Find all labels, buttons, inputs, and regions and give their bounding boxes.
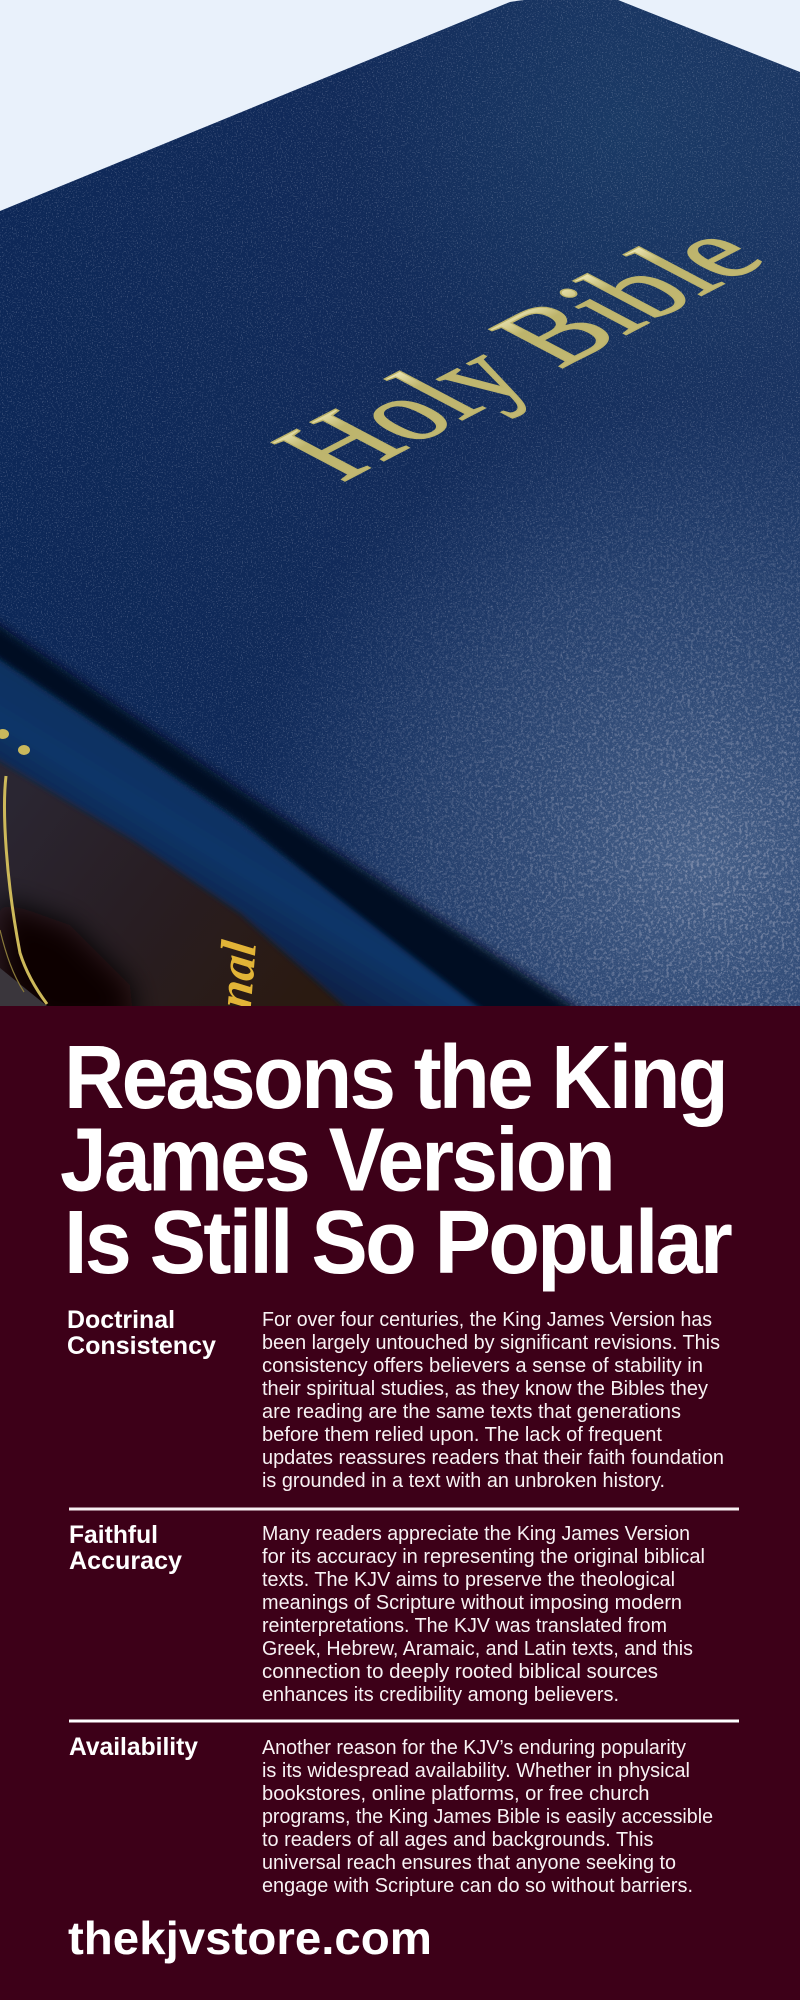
title: Reasons the King [64, 1028, 726, 1128]
text block: Faithful Accuracy: reinterpretations. The KJV was translated from [262, 1615, 667, 1637]
text block: Doctrinal Consistency: updates reassures readers that their faith foundation [262, 1447, 724, 1469]
title: James Version [60, 1110, 613, 1210]
book cover [0, 0, 800, 1006]
title [60, 1028, 732, 1293]
text block: Faithful Accuracy: Many readers appreciate the King James Version [262, 1523, 690, 1545]
text block: Doctrinal Consistency: been largely untouched by significant revisions. This [262, 1332, 720, 1354]
text block: Availability: engage with Scripture can do so without barriers. [262, 1875, 693, 1897]
text block: Availability: bookstores, online platforms, or free church [262, 1783, 650, 1805]
heading: Faithful Accuracy [69, 1521, 182, 1575]
text block: Faithful Accuracy: for its accuracy in representing the original biblical [262, 1546, 705, 1568]
text block: Availability: programs, the King James Bible is easily accessible [262, 1806, 713, 1828]
panel: Doctrinal Consistency [67, 1306, 724, 1492]
text block: Faithful Accuracy [262, 1523, 705, 1706]
blue spine band [0, 654, 495, 1020]
spine gold rule lines [0, 776, 47, 1004]
lower book spine, dark brown [0, 758, 350, 1006]
panel: Availability [69, 1733, 713, 1897]
spine gold lettering: nal [206, 938, 267, 1011]
heading: Doctrinal Consistency [67, 1306, 216, 1360]
footer website: thekjvstore.com [68, 1912, 432, 1964]
heading: Faithful Accuracy: Faithful [69, 1521, 158, 1549]
title: Is Still So Popular [64, 1193, 732, 1293]
text block: Availability [262, 1737, 713, 1897]
panel: Faithful Accuracy [69, 1521, 705, 1706]
heading: Doctrinal Consistency: Consistency [67, 1332, 216, 1360]
text block: Doctrinal Consistency: For over four centuries, the King James Version has [262, 1309, 712, 1331]
text block: Doctrinal Consistency: is grounded in a text with an unbroken history. [262, 1470, 665, 1492]
text block: Doctrinal Consistency [262, 1309, 724, 1492]
heading: Availability: Availability [69, 1733, 198, 1761]
text block: Faithful Accuracy: meanings of Scripture without imposing modern [262, 1592, 682, 1614]
photo backdrop [0, 0, 800, 211]
text block: Availability: universal reach ensures that anyone seeking to [262, 1852, 676, 1874]
heading: Doctrinal Consistency: Doctrinal [67, 1306, 175, 1334]
dark groove along hinge [0, 618, 586, 1006]
gold foil title on cover: Holy Bible [242, 208, 794, 495]
text block: Availability: Another reason for the KJV’s enduring popularity [262, 1737, 686, 1759]
text block: Doctrinal Consistency: consistency offers believers a sense of stability in [262, 1355, 703, 1377]
text block: Faithful Accuracy: connection to deeply rooted biblical sources [262, 1661, 658, 1683]
text block: Availability: is its widespread availability. Whether in physical [262, 1760, 690, 1782]
text block: Doctrinal Consistency: their spiritual studies, as they know the Bibles they [262, 1378, 708, 1400]
photo: closed blue Holy Bible [0, 0, 800, 1030]
spine gold dots [0, 729, 30, 755]
text block: Doctrinal Consistency: before them relied upon. The lack of frequent [262, 1424, 662, 1446]
text block: Doctrinal Consistency: are reading are the same texts that generations [262, 1401, 681, 1423]
heading: Faithful Accuracy: Accuracy [69, 1547, 182, 1575]
text block: Faithful Accuracy: texts. The KJV aims to preserve the theological [262, 1569, 675, 1591]
text block: Faithful Accuracy: Greek, Hebrew, Aramaic, and Latin texts, and this [262, 1638, 693, 1660]
text block: Availability: to readers of all ages and backgrounds. This [262, 1829, 654, 1851]
text block: Faithful Accuracy: enhances its credibility among believers. [262, 1684, 619, 1706]
